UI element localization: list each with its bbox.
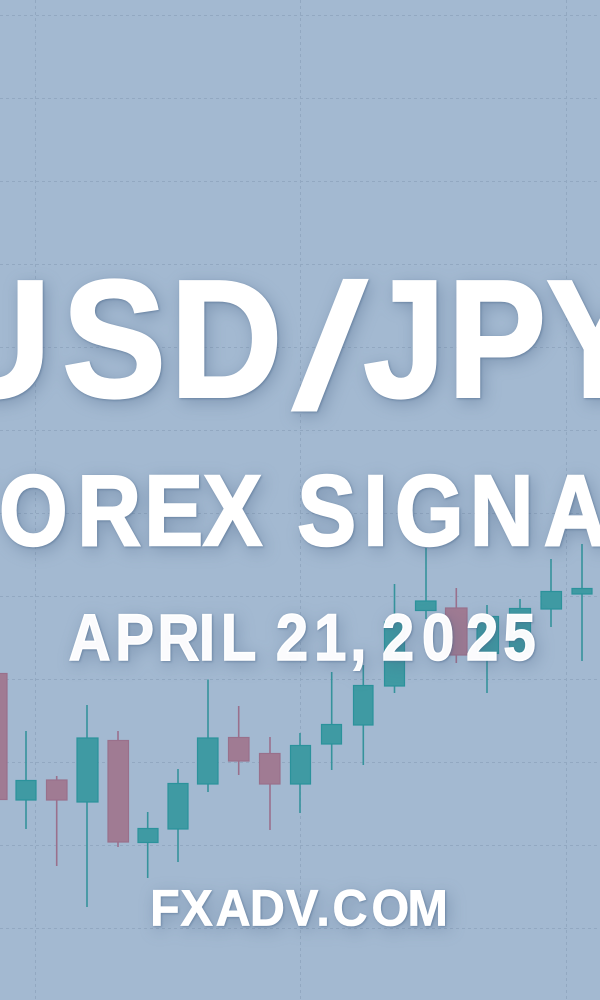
candle 9 [228,706,249,775]
candle 13 [354,665,373,765]
candle 17 [477,605,498,693]
candle 12 [322,672,342,770]
candle 10 [260,737,280,830]
candle 19 [541,559,562,627]
candle 5 [108,731,128,847]
website: FXADV.COM [150,879,448,937]
candlestick chart [0,544,592,907]
candle 8 [198,680,218,792]
title: USD/JPY [0,246,600,445]
candle 3 [46,776,67,866]
candle 1 [0,674,7,800]
candle 15 [416,548,436,619]
title: USD/JPY: / [284,249,375,445]
candle 16 [446,588,467,663]
candle 6 [138,812,158,878]
candle 11 [290,733,310,813]
candle 14 [384,584,404,693]
candle 2 [16,731,36,829]
candle 20 [572,544,592,661]
candle 4 [77,705,98,907]
candle 18 [510,599,530,652]
candle 7 [168,769,188,862]
date: APRIL 21, 2025 [69,602,536,675]
